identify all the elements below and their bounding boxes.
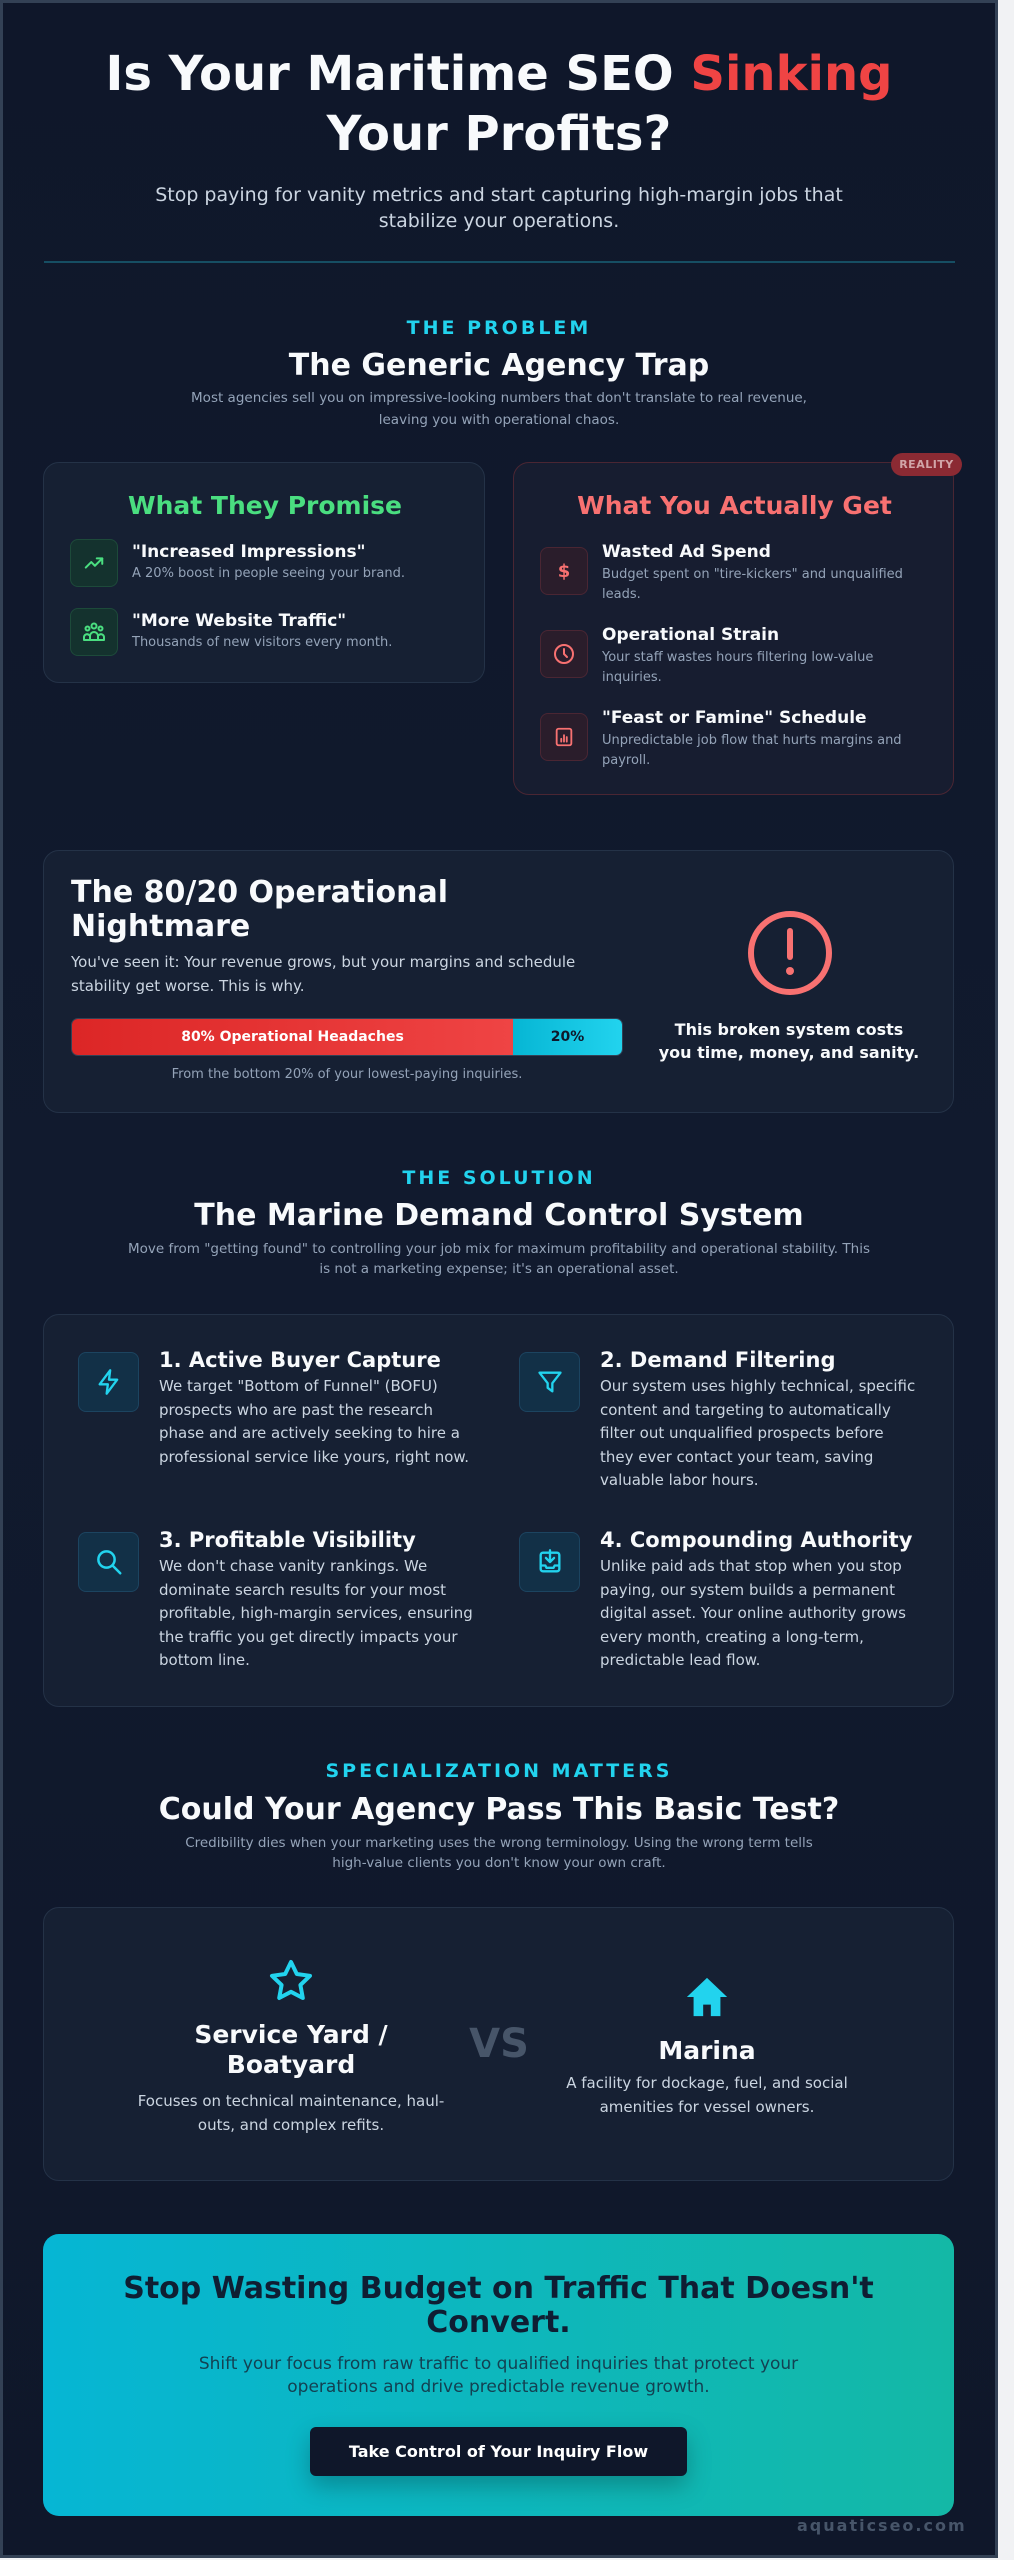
heading: marine demand control: The Marine Demand Control System <box>194 1198 804 1233</box>
title: Is Your Maritime SEO Sinking <box>106 46 892 102</box>
step 3: We don't chase vanity rankings. We dominate search results for your most profitable, high-margin services, ensuring the traffic you get directly impacts your bottom line. <box>159 1557 473 1669</box>
item: more website traffic: Thousands of new visitors every month. <box>132 635 392 650</box>
icon: clock <box>540 630 588 678</box>
icon: people <box>70 608 118 656</box>
icon: search <box>78 1532 139 1592</box>
subtitle: Stop paying for vanity metrics and start capturing high-margin jobs that stabilize your operations. <box>155 184 843 232</box>
callout: broken system <box>659 1020 919 1062</box>
panel: what you actually get <box>513 462 954 795</box>
item: wasted ad spend: Budget spent on "tire-kickers" and unqualified leads. <box>602 567 903 602</box>
step 2: 2. Demand Filtering <box>600 1348 835 1372</box>
icon: alert <box>748 911 832 995</box>
service yard <box>138 2020 444 2134</box>
callout: broken system: you time, money, and sanity. <box>659 1043 919 1062</box>
panel: comparison <box>43 1907 954 2181</box>
footer: domain: aquaticseo.com <box>797 2516 967 2535</box>
panel: what they promise <box>43 462 485 683</box>
heading: 80/20: Nightmare <box>71 909 250 944</box>
section label: the problem: THE PROBLEM <box>407 317 591 339</box>
service yard: Focuses on technical maintenance, haul-outs, and complex refits. <box>138 2092 444 2134</box>
cta text: Shift your focus from raw traffic to qualified inquiries that protect your operations and drive predictable revenue growth. <box>199 2354 798 2397</box>
panel: 80/20 nightmare <box>43 850 954 1113</box>
item: wasted ad spend <box>602 542 903 602</box>
item: feast or famine: Unpredictable job flow that hurts margins and payroll. <box>602 733 902 768</box>
service yard: Boatyard <box>227 2050 355 2079</box>
icon: money <box>540 547 588 595</box>
problem description: Most agencies sell you on impressive-looking numbers that don't translate to real revenue, leaving you with operational chaos. <box>191 390 807 428</box>
vs: VS <box>469 2021 529 2067</box>
item: operational strain <box>602 625 873 685</box>
panel: call to action <box>43 2234 954 2516</box>
description: You've seen it: Your revenue grows, but your margins and schedule stability get worse. This is why. <box>71 953 575 995</box>
item: increased impressions <box>132 542 405 581</box>
bar chart: 80/20: 20% <box>551 1029 584 1045</box>
item: increased impressions: A 20% boost in people seeing your brand. <box>132 566 405 581</box>
item: wasted ad spend: Wasted Ad Spend <box>602 542 771 562</box>
icon: money: $ <box>558 560 570 582</box>
icon: filter <box>519 1352 580 1412</box>
icon: star <box>270 1960 312 2000</box>
solution description: Move from "getting found" to controlling your job mix for maximum profitability and operational stability. This is not a marketing expense; it's an operational asset. <box>128 1241 870 1277</box>
marina <box>566 2036 848 2116</box>
item: more website traffic: "More Website Traffic" <box>132 611 346 631</box>
item: more website traffic <box>132 611 392 650</box>
badge: reality: REALITY <box>899 458 954 471</box>
service yard: Service Yard / <box>194 2020 388 2049</box>
item: feast or famine: "Feast or Famine" Schedule <box>602 708 867 728</box>
heading: basic test: Could Your Agency Pass This Basic Test? <box>159 1792 839 1827</box>
heading: generic agency trap: The Generic Agency Trap <box>289 348 709 383</box>
heading: 80/20: The 80/20 Operational <box>71 875 448 910</box>
icon: trending up <box>70 539 118 587</box>
icon: house <box>687 1978 727 2016</box>
heading: promise: What They Promise <box>128 491 402 520</box>
button <box>310 2427 687 2476</box>
item: feast or famine <box>602 708 902 768</box>
item: increased impressions: "Increased Impressions" <box>132 542 365 562</box>
item: operational strain: Your staff wastes hours filtering low-value inquiries. <box>602 650 873 685</box>
panel: solution steps <box>43 1314 954 1707</box>
marina: Marina <box>658 2036 756 2065</box>
callout: broken system: This broken system costs <box>675 1020 903 1039</box>
section label: the solution: THE SOLUTION <box>402 1167 596 1189</box>
step 3: 3. Profitable Visibility <box>159 1528 416 1552</box>
icon: download box <box>519 1532 580 1592</box>
marina: A facility for dockage, fuel, and social amenities for vessel owners. <box>566 2074 848 2116</box>
step 4: 4. Compounding Authority <box>600 1528 912 1552</box>
step 1: 1. Active Buyer Capture <box>159 1348 441 1372</box>
step 4: Unlike paid ads that stop when you stop paying, our system builds a permanent digital asset. Your online authority grows every month, creating a long-term, predictable lead flow. <box>600 1557 906 1669</box>
icon: bolt <box>78 1352 139 1412</box>
title <box>106 46 892 162</box>
heading: actually get: What You Actually Get <box>577 491 892 520</box>
heading: 80/20 <box>71 875 448 944</box>
title: Your Profits? <box>327 106 671 162</box>
step 2: Our system uses highly technical, specific content and targeting to automatically filter out unqualified prospects before they ever contact your team, saving valuable labor hours. <box>600 1377 915 1489</box>
bar chart: 80/20: 80% Operational Headaches <box>181 1029 404 1045</box>
icon: chart <box>540 713 588 761</box>
badge: reality <box>891 453 962 476</box>
bar chart: 80/20 <box>71 1018 623 1056</box>
bar caption: From the bottom 20% of your lowest-paying inquiries. <box>172 1067 522 1082</box>
specialization description: Credibility dies when your marketing uses the wrong terminology. Using the wrong term tells high-value clients you don't know your own craft. <box>185 1835 813 1871</box>
cta heading: Stop Wasting Budget on Traffic That Doesn't Convert. <box>123 2271 874 2340</box>
section label: specialization: SPECIALIZATION MATTERS <box>326 1760 672 1782</box>
step 1: We target "Bottom of Funnel" (BOFU) prospects who are past the research phase and are actively seeking to hire a professional service like yours, right now. <box>159 1377 469 1466</box>
button: Take Control of Your Inquiry Flow <box>349 2442 648 2461</box>
item: operational strain: Operational Strain <box>602 625 779 645</box>
